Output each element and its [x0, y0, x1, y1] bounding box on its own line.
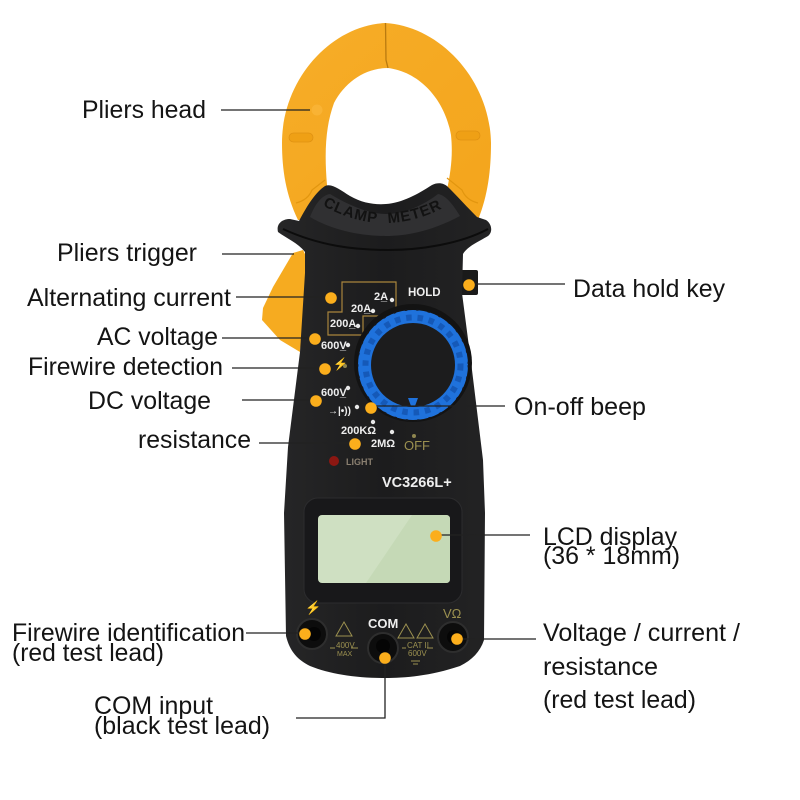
label: data hold key: Data hold key [573, 275, 725, 303]
leader: DC voltage [242, 395, 322, 407]
right socket [438, 622, 468, 652]
dial range labels: 20A̲ [351, 303, 371, 315]
label: COM input: (black test lead) [94, 712, 270, 740]
COM socket [368, 633, 398, 663]
label: voltage current resistance: resistance [543, 653, 658, 681]
dial range labels: 600V̲ [321, 387, 347, 399]
light indicator: LIGHT [346, 457, 373, 467]
warning marks and ratings: 400V [336, 641, 355, 650]
leader: pliers trigger [222, 253, 294, 255]
label: alternating current: Alternating current [27, 284, 231, 312]
label: voltage current resistance [543, 619, 740, 714]
leader: AC voltage [222, 333, 321, 345]
LCD bezel [304, 498, 462, 603]
label: DC voltage: DC voltage [88, 387, 211, 415]
dial range labels: →|•)) [328, 406, 351, 417]
COM label: COM [368, 616, 398, 631]
leader: on-off beep [365, 402, 505, 414]
warning marks and ratings: 600V [408, 649, 427, 658]
leader: resistance [259, 438, 361, 450]
label: COM input [94, 692, 270, 740]
warning marks and ratings [330, 622, 433, 664]
left socket [297, 619, 327, 649]
label: resistance: resistance [138, 426, 251, 454]
range box outline [328, 282, 396, 335]
dial range labels: OFF [404, 438, 430, 453]
label: LCD display: (36 * 18mm) [543, 542, 680, 570]
clamp meter nameplate: CLAMP METER [324, 198, 442, 223]
selector position dots [343, 298, 416, 438]
label: firewire identification: Firewire identification [12, 619, 245, 647]
collar shading [283, 229, 488, 250]
label: firewire identification [12, 619, 245, 667]
label: COM input: COM input [94, 692, 213, 720]
label: on-off beep: On-off beep [514, 393, 646, 421]
HOLD label: HOLD [408, 287, 441, 299]
rotary dial [354, 304, 472, 422]
lightning symbol: ⚡ [305, 600, 321, 616]
clamp meter nameplate [310, 194, 460, 236]
pliers head (orange jaw) [282, 23, 491, 220]
leader: voltage current resistance [451, 633, 536, 645]
leader: COM input [296, 652, 391, 718]
label: pliers head: Pliers head [82, 96, 206, 124]
dial range labels: 2A̲ [374, 291, 388, 303]
warning marks and ratings: MAX [337, 651, 352, 658]
data hold key [458, 270, 478, 295]
leader: alternating current [236, 292, 337, 304]
pliers trigger (orange) [262, 250, 308, 352]
label: LCD display: LCD display [543, 523, 677, 551]
label: pliers trigger: Pliers trigger [57, 239, 197, 267]
warning marks and ratings: CAT II [407, 641, 429, 650]
dial range labels: 200A̲ [330, 318, 356, 330]
dial range labels: 2MΩ [371, 438, 395, 450]
model number: VC3266L+ [382, 475, 452, 491]
label: firewire detection: Firewire detection [28, 353, 223, 381]
clamp meter device [262, 23, 492, 678]
leader: firewire detection [232, 363, 331, 375]
leader: pliers head [221, 104, 322, 116]
label: LCD display [543, 523, 680, 570]
label: AC voltage: AC voltage [97, 323, 218, 351]
LCD screen [318, 515, 450, 583]
label: firewire identification: (red test lead) [12, 639, 164, 667]
dial range labels [321, 291, 430, 453]
meter body [278, 183, 491, 678]
dial range labels: 200KΩ [341, 425, 376, 437]
leader: data hold key [463, 279, 565, 291]
light indicator [329, 456, 373, 467]
label: voltage current resistance: Voltage / current / [543, 619, 740, 647]
leader: LCD display [430, 530, 530, 542]
leader: firewire identification [246, 628, 311, 640]
dial range labels: ⚡ [333, 357, 348, 371]
dial range labels: 600V̲ [321, 340, 347, 352]
VΩ label: VΩ [443, 606, 462, 621]
label: voltage current resistance: (red test lead) [543, 686, 696, 714]
